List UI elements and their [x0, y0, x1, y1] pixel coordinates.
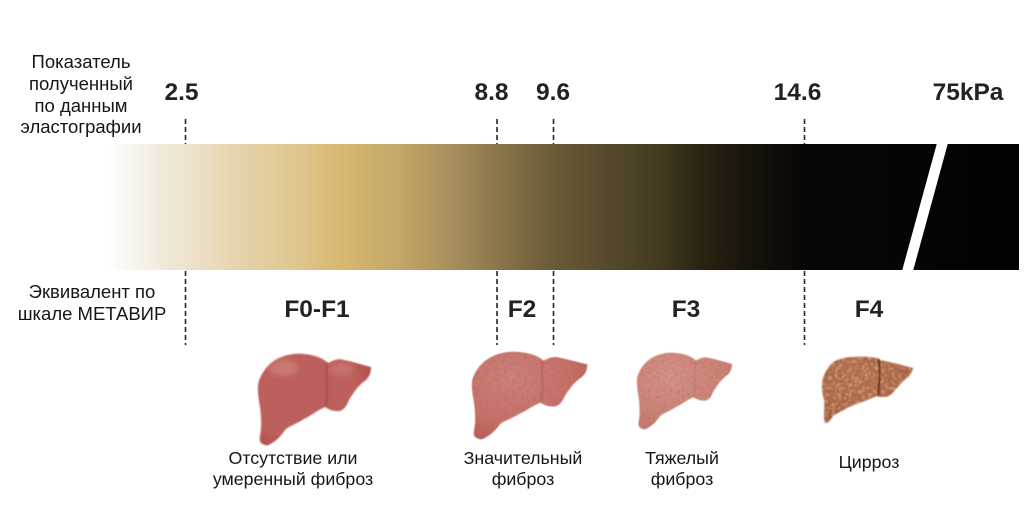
heading: METAVIR equivalent: Эквивалент по [29, 281, 155, 302]
caption: F0-F1: умеренный фиброз [213, 469, 373, 489]
heading: elastography value [20, 51, 142, 137]
icon: liver F0-F1 [258, 354, 371, 445]
value labels in kPa [164, 79, 1004, 106]
icon: liver F2 [472, 352, 587, 439]
icon: liver F4 cirrhosis [822, 357, 913, 423]
heading: elastography value: Показатель [32, 51, 130, 72]
caption: F2: Значительный [464, 448, 582, 468]
value labels in kPa: 2.5 [164, 79, 199, 106]
caption: F0-F1 [213, 448, 373, 489]
fibrosis stage labels: F2 [508, 296, 536, 323]
caption: F2 [464, 448, 582, 489]
value labels in kPa: 14.6 [774, 79, 821, 106]
fibrosis stage labels: F3 [672, 296, 700, 323]
fibrosis stage labels [284, 296, 884, 323]
caption: F3: Тяжелый [645, 448, 719, 468]
icon: liver F3 [637, 353, 732, 429]
caption: F0-F1: Отсутствие или [229, 448, 357, 468]
caption: F4: Цирроз [839, 452, 899, 472]
value labels in kPa: 8.8 [474, 79, 509, 106]
value labels in kPa: 9.6 [536, 79, 570, 106]
caption: F3: фиброз [651, 469, 713, 489]
heading: elastography value: по данным [35, 95, 127, 116]
heading: elastography value: эластографии [20, 116, 142, 137]
dashed threshold markers [186, 119, 804, 345]
fibrosis stage labels: F4 [855, 296, 884, 323]
heading: elastography value: полученный [29, 73, 133, 94]
gradient elasticity scale bar [110, 143, 1019, 271]
scale break slash [902, 143, 948, 271]
caption: F2: фиброз [492, 469, 554, 489]
caption: F3 [645, 448, 719, 489]
heading: METAVIR equivalent [18, 281, 166, 324]
value labels in kPa: 75kPa [933, 79, 1004, 106]
fibrosis stage labels: F0-F1 [284, 296, 350, 323]
heading: METAVIR equivalent: шкале МЕТАВИР [18, 303, 166, 324]
